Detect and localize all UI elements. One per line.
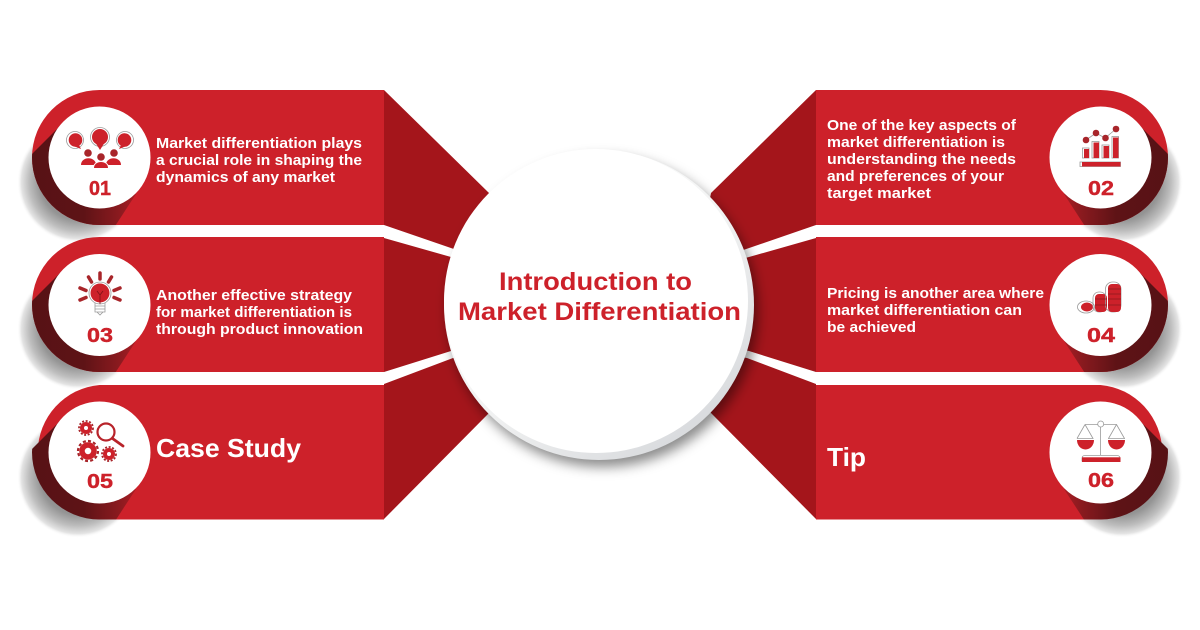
number 02: 02 <box>1088 178 1114 200</box>
heading: case study: Case Study <box>156 433 302 463</box>
number 04: 04 <box>1087 325 1116 347</box>
icon: speech bubbles and people <box>66 128 134 168</box>
panel 04: pricing <box>746 237 1180 388</box>
number 03: 03 <box>87 325 113 347</box>
panel 05: case study <box>17 350 500 538</box>
panel 01: market differentiation role <box>17 90 500 258</box>
text block 03 <box>156 287 363 338</box>
number 05: 05 <box>87 471 113 493</box>
panel 02: understanding the target market <box>700 90 1183 258</box>
text block 03: Another effective strategy <box>156 287 353 304</box>
text block 01: dynamics of any market <box>156 169 335 186</box>
text block 04: Pricing is another area where <box>827 285 1044 302</box>
icon: bar chart with trend line <box>1080 126 1120 166</box>
text block 04: be achieved <box>827 319 916 336</box>
icon: coin stacks <box>1078 282 1121 313</box>
text block 04 <box>827 285 1044 336</box>
text block 01: Market differentiation plays <box>156 135 362 152</box>
text block 03: for market differentiation is <box>156 304 352 321</box>
text block 02: target market <box>827 185 931 202</box>
title: Market Differentiation <box>458 298 741 326</box>
heading: tip: Tip <box>827 442 866 472</box>
text block 02: market differentiation is <box>827 134 1005 151</box>
text block 02: One of the key aspects of <box>827 117 1017 134</box>
center circle with title <box>444 149 758 467</box>
text block 02: and preferences of your <box>827 168 1004 185</box>
icon: balance scale <box>1077 421 1125 462</box>
number 01: 01 <box>89 178 111 200</box>
number 06: 06 <box>1088 470 1114 492</box>
text block 04: market differentiation can <box>827 302 1022 319</box>
icon: light bulb <box>80 273 120 315</box>
title: Introduction to <box>499 268 692 296</box>
text block 01: a crucial role in shaping the <box>156 152 362 169</box>
text block 03: through product innovation <box>156 321 363 338</box>
icon: gears and magnifier <box>78 421 123 461</box>
panel 03: product innovation <box>20 237 451 388</box>
text block 02: understanding the needs <box>827 151 1016 168</box>
text block 02 <box>827 117 1017 202</box>
text block 01 <box>156 135 362 186</box>
title <box>458 268 741 326</box>
panel 06: tip <box>700 350 1183 538</box>
